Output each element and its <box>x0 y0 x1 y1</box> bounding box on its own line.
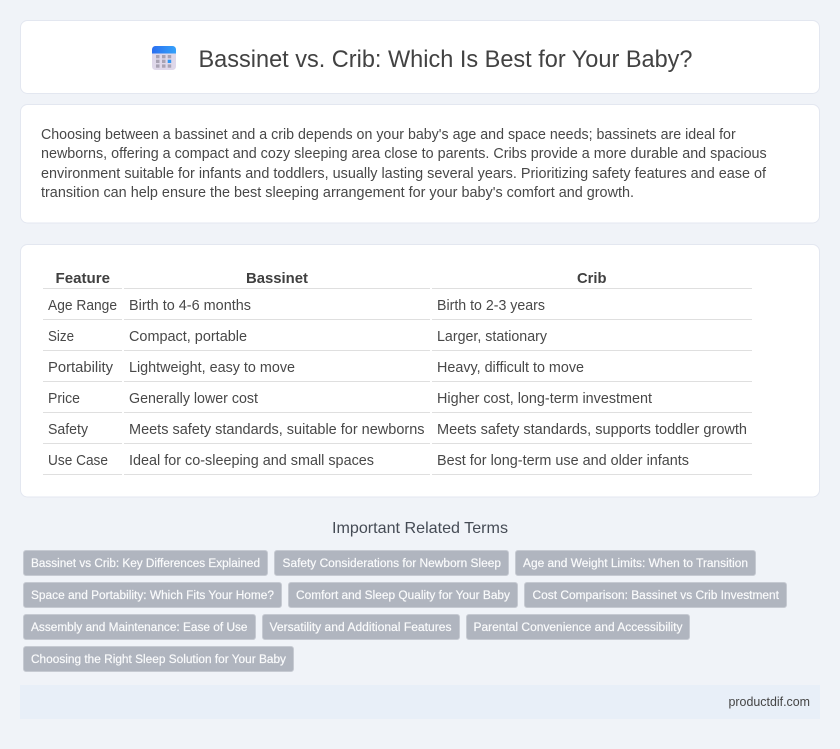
table row: portability: Heavy, difficult to move <box>437 360 584 376</box>
tag: age and weight limits <box>516 550 756 576</box>
tag: comfort and sleep quality: Comfort and Sleep Quality for Your Baby <box>296 588 511 602</box>
tag: comfort and sleep quality <box>288 582 518 608</box>
panel: comparison table <box>20 244 820 497</box>
table row: portability <box>43 360 752 382</box>
table row: age range: Birth to 4-6 months <box>129 298 251 314</box>
table row: price: Price <box>48 391 80 407</box>
footer bar <box>20 685 820 719</box>
tag: space and portability <box>24 582 282 608</box>
tag: versatility <box>262 614 460 640</box>
tag: age and weight limits: Age and Weight Limits: When to Transition <box>523 556 748 570</box>
table header row: Crib <box>577 270 606 287</box>
tag: safety considerations <box>274 550 508 576</box>
table row: safety <box>43 422 752 444</box>
panel: introduction <box>20 104 820 223</box>
table row: use case: Best for long-term use and older infants <box>437 453 689 469</box>
tag: cost comparison <box>524 582 786 608</box>
tag: versatility: Versatility and Additional Features <box>270 620 452 634</box>
table header row <box>43 270 752 289</box>
tag: assembly and maintenance: Assembly and Maintenance: Ease of Use <box>31 620 248 634</box>
table row: price <box>43 391 752 413</box>
table row: safety: Meets safety standards, suitable for newborns <box>129 422 424 438</box>
table header row: Bassinet <box>246 270 308 287</box>
table row: age range <box>43 298 752 320</box>
intro paragraph: transition can help ensure the best sleeping arrangement for your baby's comfort and growth. <box>41 185 634 201</box>
heading: important related terms: Important Related Terms <box>332 520 508 537</box>
tag: safety considerations: Safety Considerations for Newborn Sleep <box>282 556 501 570</box>
table row: size: Compact, portable <box>129 329 247 345</box>
table row: size: Larger, stationary <box>437 329 548 345</box>
table row: portability: Lightweight, easy to move <box>129 360 295 376</box>
table header row: Feature <box>56 270 110 287</box>
table row: price: Generally lower cost <box>129 391 258 407</box>
title: Bassinet vs. Crib: Which Is Best for Your Baby? <box>198 46 692 73</box>
icon: calendar <box>152 46 176 70</box>
intro paragraph <box>41 127 767 201</box>
table row: safety: Safety <box>48 422 89 438</box>
footer source text: productdif.com <box>728 695 810 709</box>
tag: key differences: Bassinet vs Crib: Key Differences Explained <box>31 556 260 570</box>
tag: parental convenience: Parental Convenience and Accessibility <box>474 620 683 634</box>
table row: age range: Birth to 2-3 years <box>437 298 545 314</box>
table row: portability: Portability <box>48 360 114 376</box>
intro paragraph: environment suitable for infants and toddlers, usually lasting several years. Prioritizing safety features and ease of <box>41 166 766 182</box>
table row: safety: Meets safety standards, supports toddler growth <box>437 422 747 438</box>
tag: cost comparison: Cost Comparison: Bassinet vs Crib Investment <box>532 588 780 602</box>
panel: related term tags <box>24 550 786 672</box>
table row: price: Higher cost, long-term investment <box>437 391 652 407</box>
intro paragraph: Choosing between a bassinet and a crib depends on your baby's age and space needs; bassinets are ideal for <box>41 127 736 143</box>
tag: assembly and maintenance <box>24 614 256 640</box>
tag: choosing the right sleep solution <box>24 646 294 672</box>
table row: use case <box>43 453 752 475</box>
tag: parental convenience <box>466 614 690 640</box>
table row: use case: Ideal for co-sleeping and small spaces <box>129 453 374 469</box>
tag: space and portability: Space and Portability: Which Fits Your Home? <box>31 588 274 602</box>
tag: choosing the right sleep solution: Choosing the Right Sleep Solution for Your Baby <box>31 652 287 666</box>
table row: use case: Use Case <box>48 453 108 469</box>
intro paragraph: newborns, offering a compact and cozy sleeping area close to parents. Cribs provide a more durable and spacious <box>41 146 767 162</box>
tag: key differences <box>24 550 268 576</box>
table row: age range: Age Range <box>48 298 117 314</box>
table row: size <box>43 329 752 351</box>
panel: title header <box>20 20 820 94</box>
table row: size: Size <box>48 329 74 345</box>
